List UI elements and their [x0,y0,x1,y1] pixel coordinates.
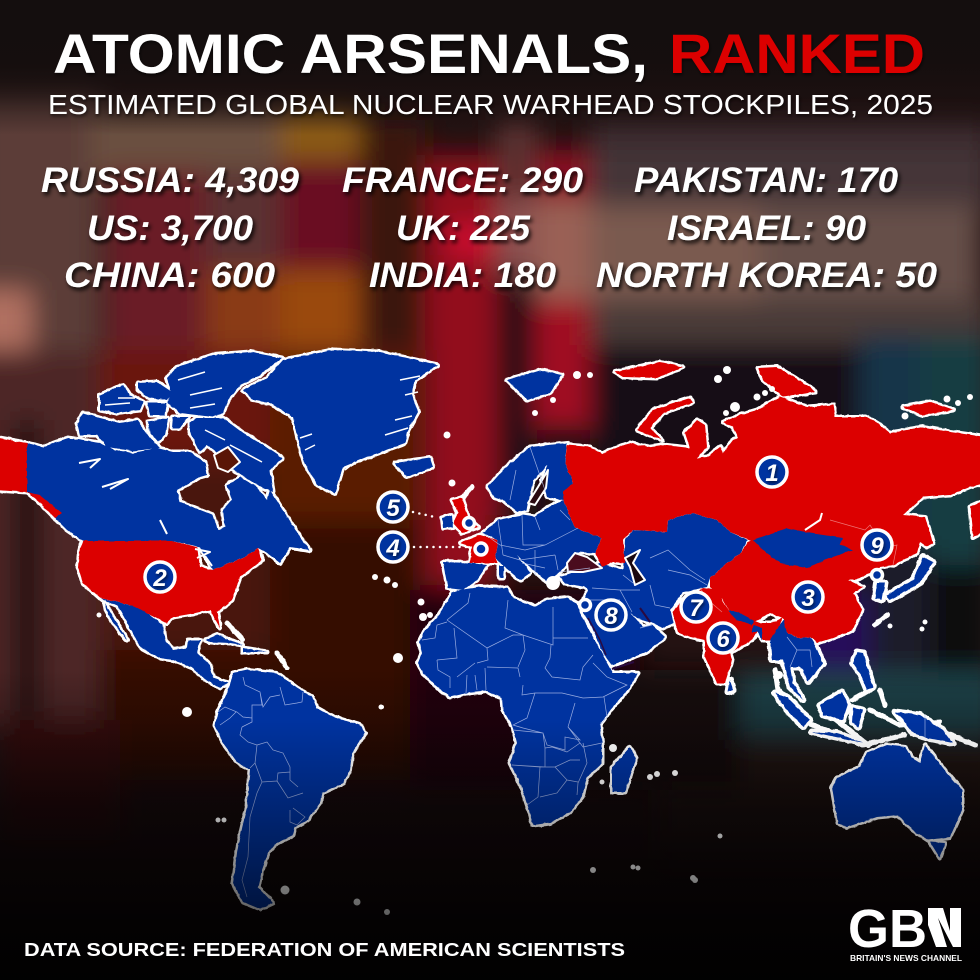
warhead counts by country: NORTH KOREA: 50 [596,256,938,295]
title: RANKED [669,22,925,85]
blue countries [27,350,962,909]
warhead counts by country [41,161,938,295]
subtitle: ESTIMATED GLOBAL NUCLEAR WARHEAD STOCKPILES, 2025 [48,89,933,120]
numbered rank markers: 9 [870,533,884,560]
warhead counts by country: PAKISTAN: 170 [634,161,899,200]
location dots [464,518,882,610]
numbered rank markers: 5 [386,495,400,522]
bottom fade over map [0,720,980,980]
title: ATOMIC ARSENALS, [53,22,648,85]
numbered rank markers: 8 [604,603,618,630]
numbered rank markers: 1 [765,460,779,487]
warhead counts by country: INDIA: 180 [369,256,557,295]
inland seas and lakes [79,372,822,669]
numbered rank markers: 6 [716,626,730,653]
small islands [96,366,973,915]
Mongolia, Nepal and Bangladesh [729,528,853,640]
numbered rank markers: 7 [689,595,704,622]
warhead counts by country: UK: 225 [396,209,531,248]
dotted leader lines [413,512,468,547]
warhead counts by country: CHINA: 600 [64,256,276,295]
numbered rank markers: 3 [801,585,815,612]
country borders [218,447,925,897]
red nuclear states [0,362,980,683]
numbered rank markers: 4 [385,535,400,562]
world map [0,350,980,980]
warhead counts by country: ISRAEL: 90 [667,209,867,248]
warhead counts by country: US: 3,700 [87,209,254,248]
GB News logo: BRITAIN'S NEWS CHANNEL [850,953,962,963]
title [53,22,925,85]
coastline halo [0,350,980,909]
GB News logo [848,899,962,963]
numbered rank markers [145,457,892,653]
GB News logo: GB [848,899,927,959]
warhead counts by country: RUSSIA: 4,309 [41,161,300,200]
data source: DATA SOURCE: FEDERATION OF AMERICAN SCIENTISTS [24,940,625,960]
warhead counts by country: FRANCE: 290 [342,161,584,200]
numbered rank markers: 2 [152,565,167,592]
